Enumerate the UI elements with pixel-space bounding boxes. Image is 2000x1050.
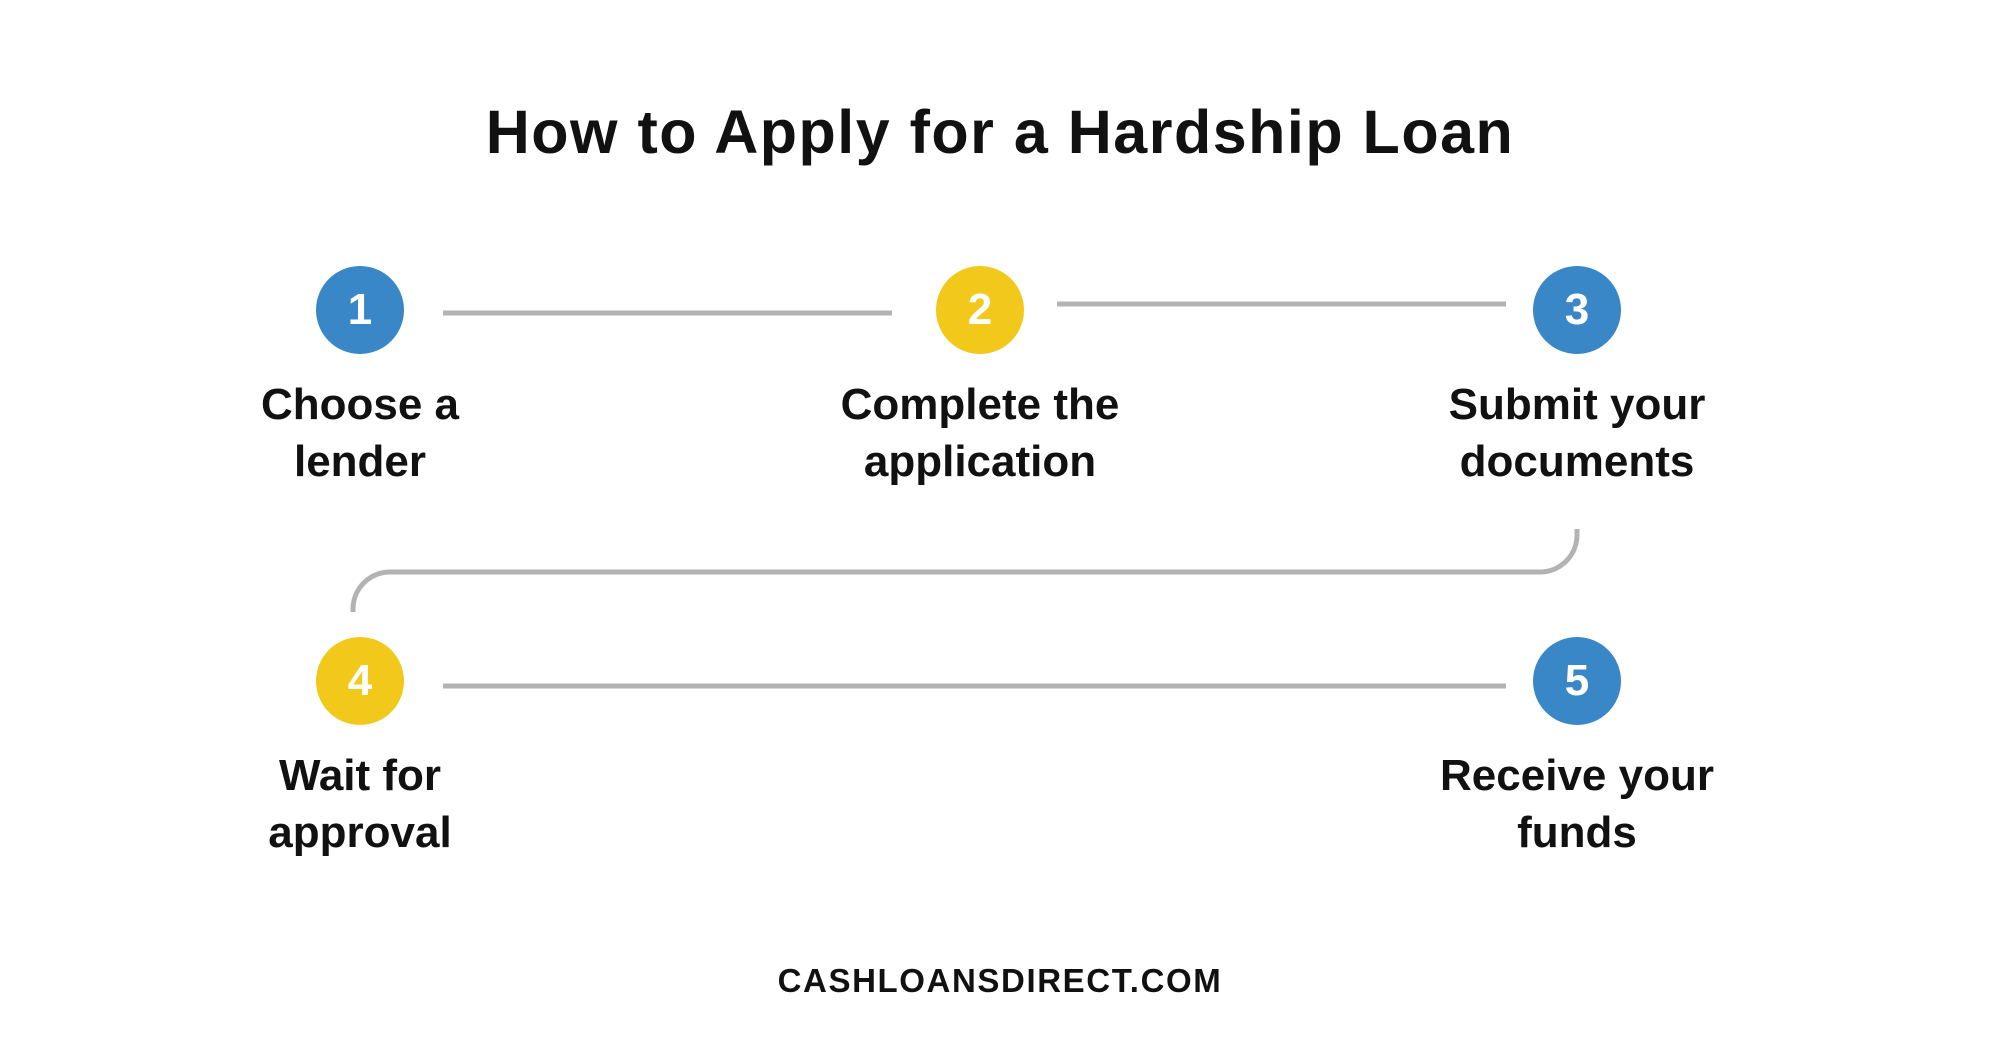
step 1: [261, 266, 460, 486]
label 3: documents: [1460, 437, 1694, 486]
label 4: approval: [268, 808, 452, 857]
circle 5: 5: [1565, 656, 1589, 705]
circle 2: [936, 266, 1024, 354]
step 2: [841, 266, 1119, 486]
label 2: Complete the: [841, 380, 1119, 429]
label 5: funds: [1517, 808, 1637, 857]
circle 3: 3: [1565, 285, 1589, 334]
circle 4: 4: [348, 656, 372, 705]
label 5: [1440, 751, 1714, 857]
label 3: Submit your: [1449, 380, 1705, 429]
label 2: application: [864, 437, 1096, 486]
label 5: Receive your: [1440, 751, 1714, 800]
circle 5: [1533, 637, 1621, 725]
label 1: Choose a: [261, 380, 459, 429]
label 1: [261, 380, 460, 486]
title: How to Apply for a Hardship Loan: [486, 98, 1514, 166]
circle 3: [1533, 266, 1621, 354]
label 2: [841, 380, 1119, 486]
label 3: [1449, 380, 1705, 486]
label 4: Wait for: [279, 751, 441, 800]
label 1: lender: [294, 437, 426, 486]
step 5: [1440, 637, 1714, 857]
circle 2: 2: [968, 285, 992, 334]
circle 1: 1: [348, 285, 372, 334]
step 4: [268, 637, 452, 857]
footer: CASHLOANSDIRECT.COM: [778, 962, 1222, 999]
label 4: [268, 751, 452, 857]
step 3: [1449, 266, 1705, 486]
circle 1: [316, 266, 404, 354]
circle 4: [316, 637, 404, 725]
